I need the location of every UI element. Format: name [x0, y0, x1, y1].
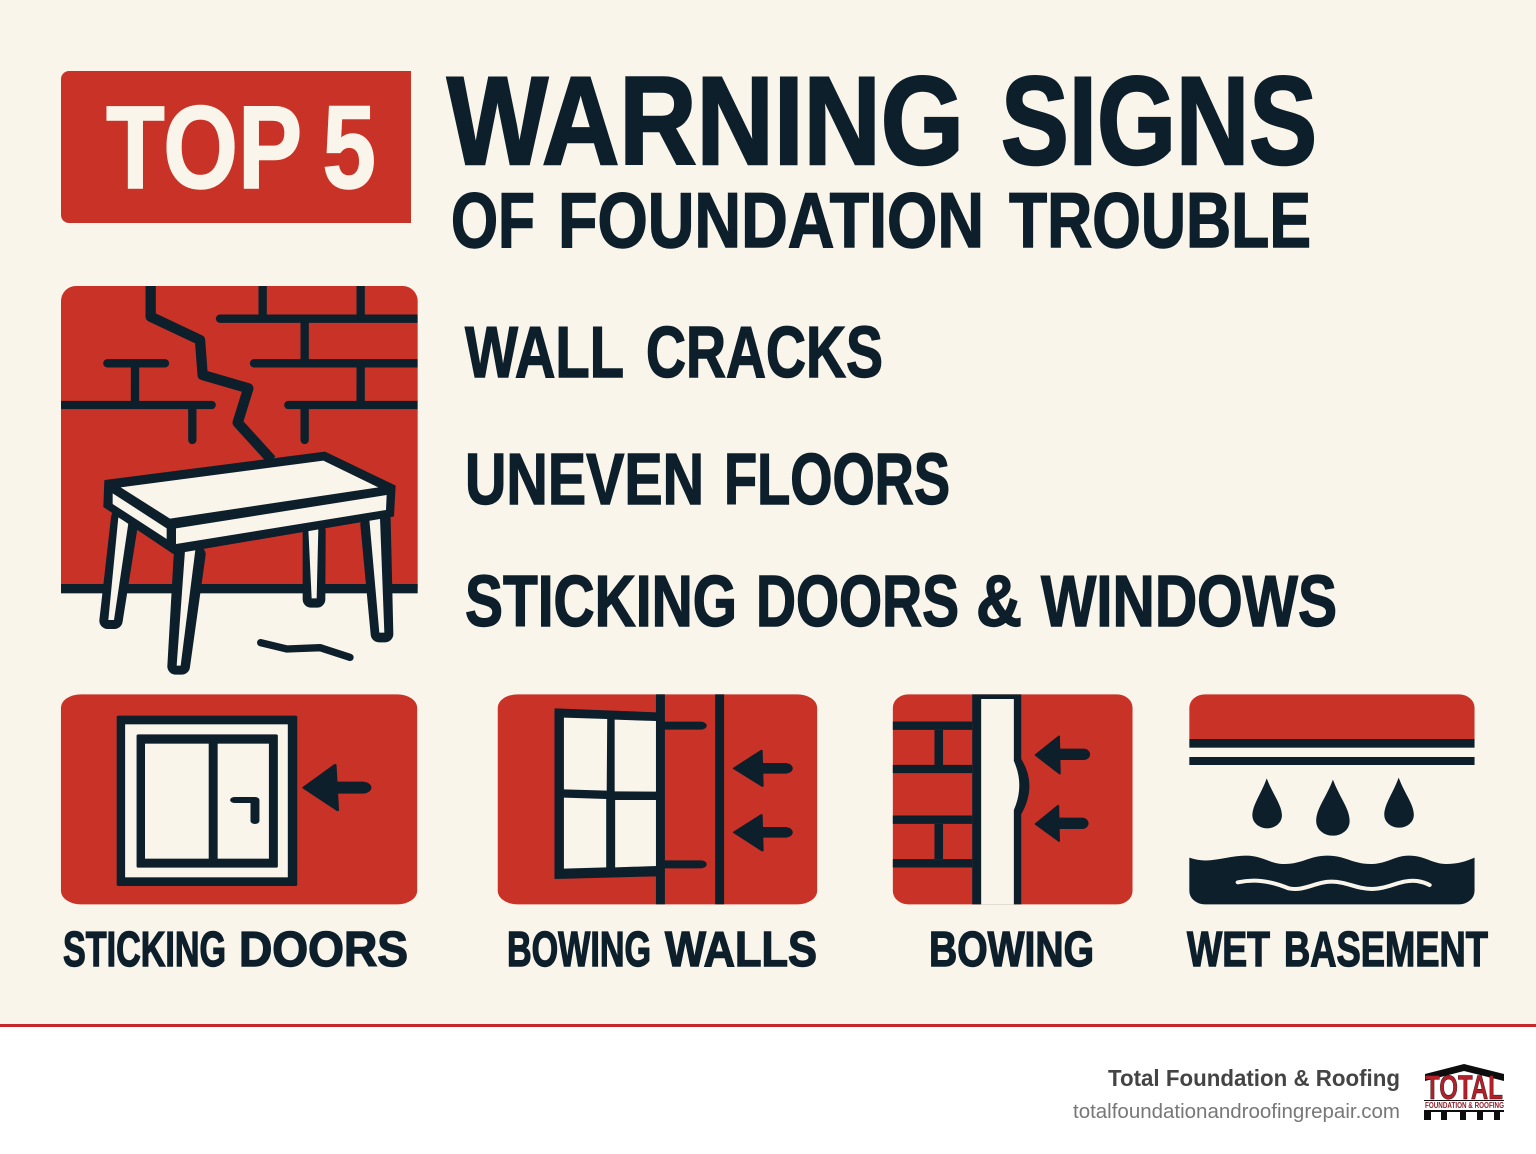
water [1189, 856, 1475, 904]
list item: uneven floors: FLOORS [724, 440, 950, 520]
list item: wall cracks: WALL [465, 313, 624, 393]
label: bowing: BOWING [929, 923, 1094, 977]
back left leg [108, 518, 129, 621]
wall panel [61, 286, 418, 588]
footer [0, 1024, 1536, 1154]
list item: wall cracks: CRACKS [646, 313, 883, 393]
front leg [176, 554, 197, 666]
right leg [369, 519, 385, 634]
floor crack [261, 643, 350, 657]
list item: sticking doors and windows: WINDOWS [1041, 562, 1337, 642]
label: sticking doors: STICKING [63, 923, 226, 977]
label: bowing walls [507, 923, 817, 977]
table [104, 452, 395, 666]
back right leg [311, 531, 317, 599]
list item: wall cracks [465, 313, 883, 393]
label: sticking doors [63, 923, 408, 977]
list item: sticking doors and windows: STICKING [465, 562, 737, 642]
subtitle [451, 176, 1311, 264]
subtitle: TROUBLE [1009, 176, 1311, 264]
list item: uneven floors: UNEVEN [465, 440, 704, 520]
subtitle: FOUNDATION [558, 176, 984, 264]
title: SIGNS [1001, 52, 1317, 191]
label: sticking doors: DOORS [239, 923, 408, 977]
label: wet basement [1187, 923, 1488, 977]
icon: sticking doors [61, 694, 417, 904]
table top [104, 452, 395, 553]
list item: sticking doors and windows: DOORS [756, 562, 959, 642]
illustration: cracked wall and uneven table [50, 280, 427, 666]
water drops [1252, 778, 1282, 828]
label: wet basement: WET [1187, 923, 1270, 977]
website: totalfoundationandroofingrepair.com [1073, 1101, 1400, 1123]
list item: sticking doors and windows: & [976, 562, 1022, 642]
icon: bowing [893, 694, 1133, 904]
logo: TOTAL [1425, 1069, 1503, 1107]
subtitle: OF [451, 176, 535, 264]
logo: FOUNDATION & ROOFING [1425, 1101, 1504, 1110]
brick lines [50, 280, 427, 440]
list item: sticking doors and windows [465, 562, 1337, 642]
list item: uneven floors [465, 440, 950, 520]
label: bowing walls: BOWING [507, 923, 651, 977]
icon: bowing walls [498, 694, 817, 904]
badge: top 5: TOP 5 [106, 82, 376, 214]
label: bowing walls: WALLS [665, 923, 817, 977]
title [447, 52, 1317, 191]
title: WARNING [447, 52, 964, 191]
icon: wet basement [1189, 694, 1475, 904]
floor line [61, 584, 418, 593]
company name: Total Foundation & Roofing [1108, 1065, 1400, 1091]
logo [1424, 1064, 1504, 1120]
wall crack [151, 286, 272, 460]
